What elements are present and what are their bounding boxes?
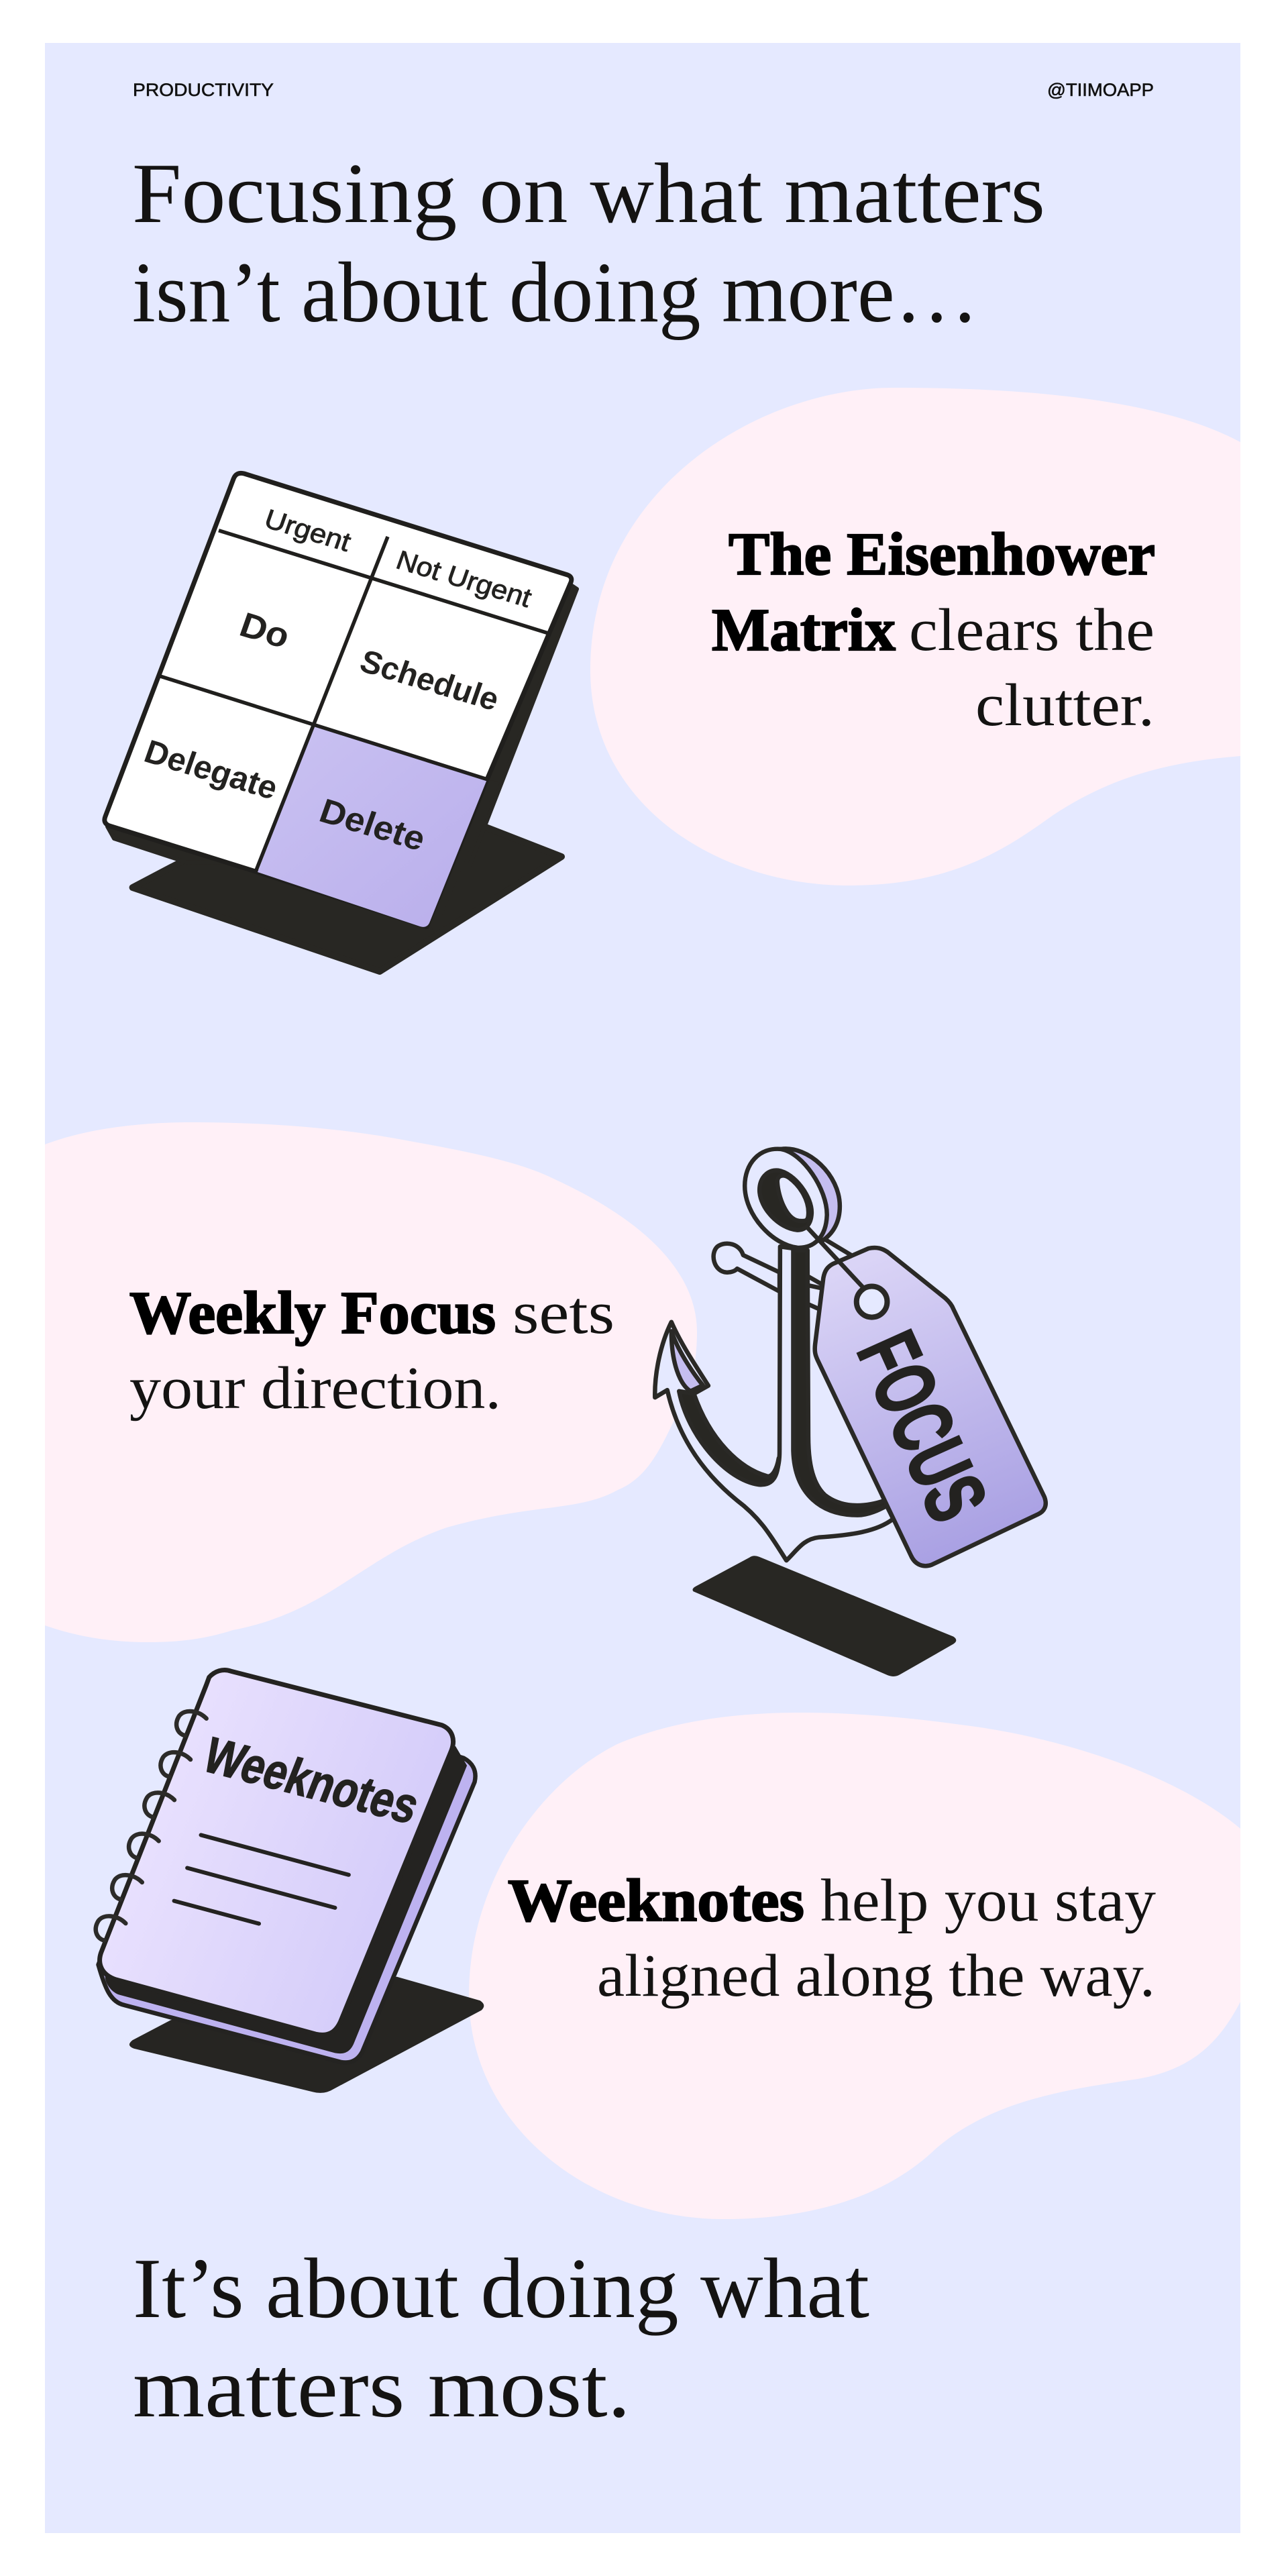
- category label: PRODUCTIVITY: [133, 80, 274, 100]
- anchor shape: [655, 1239, 893, 1560]
- anchor body: [655, 1246, 893, 1560]
- callout text: The Eisenhower Matrix clears the clutter: The Eisenhower: [729, 521, 1155, 588]
- fluke highlight: [672, 1331, 703, 1391]
- illustration: Weeknotes notebook: [96, 1670, 484, 2093]
- callout text: The Eisenhower Matrix clears the clutter: [712, 521, 1155, 739]
- closing statement: matters most.: [133, 2340, 631, 2435]
- crossbar left ball: [714, 1244, 780, 1291]
- closing statement: It’s about doing what: [133, 2241, 869, 2336]
- title: isn’t about doing more…: [132, 245, 979, 340]
- note lines: [174, 1835, 349, 1924]
- anchor base shadow: [692, 1556, 956, 1676]
- quadrant labels: Schedule: [356, 643, 503, 718]
- notebook label: Weeknotes: [196, 1727, 427, 1835]
- blob: Eisenhower callout background: [590, 388, 1240, 885]
- quadrant labels: Delegate: [140, 733, 282, 807]
- quadrant labels: Do: [235, 606, 294, 656]
- callout text: Weekly Focus sets your direction: your direction.: [129, 1355, 501, 1421]
- title: [132, 146, 1045, 340]
- notebook cover: [100, 1670, 453, 2035]
- callout text: Weekly Focus sets your direction: Weekly Focus: [129, 1280, 496, 1346]
- callout text: Weekly Focus sets your direction: [129, 1280, 614, 1421]
- bottom right edge cover: [430, 780, 498, 934]
- illustration: Eisenhower matrix board: [105, 473, 577, 971]
- callout text: The Eisenhower Matrix clears the clutter: clutter.: [975, 672, 1155, 739]
- callout text: The Eisenhower Matrix clears the clutter: clears the: [909, 597, 1155, 663]
- callout text: Weeknotes help you stay aligned: [508, 1868, 1156, 2009]
- callout text: Weeknotes help you stay aligned: Weeknotes: [508, 1868, 804, 1934]
- callout text: Weeknotes help you stay aligned: help you stay: [820, 1868, 1156, 1934]
- ground shadow: [133, 826, 561, 971]
- notebook ground shadow: [129, 1977, 484, 2093]
- delete quadrant: [258, 727, 487, 927]
- illustration: anchor with focus tag: [655, 1148, 1046, 1676]
- crossbar back: [808, 1239, 853, 1286]
- anchor ring: [745, 1148, 840, 1248]
- focus tag: [806, 1226, 1046, 1566]
- handle label: @TIIMOAPP: [1047, 80, 1154, 100]
- closing statement: [133, 2241, 869, 2435]
- callout text: Weekly Focus sets your direction: sets: [513, 1280, 614, 1346]
- quadrant labels: Urgent: [261, 504, 355, 557]
- crossbar right stub: [798, 1285, 824, 1309]
- blob: Weekly Focus callout background: [45, 1122, 697, 1642]
- spiral binding: [96, 1711, 207, 1941]
- notebook body: [96, 1670, 476, 2063]
- title: Focusing on what matters: [132, 146, 1045, 241]
- header labels: [133, 80, 1154, 100]
- board back shadow: [107, 585, 577, 865]
- quadrant labels: [140, 504, 535, 858]
- quadrant labels: Delete: [315, 792, 430, 858]
- shank shadow: [793, 1250, 886, 1515]
- matrix grid lines: [160, 531, 548, 870]
- quadrant labels: Not Urgent: [392, 545, 535, 613]
- tag label: FOCUS: [839, 1318, 1006, 1535]
- board face: [105, 473, 572, 927]
- left hook shadow: [679, 1391, 779, 1485]
- callout text: Weeknotes help you stay aligned: aligned along the way.: [597, 1943, 1155, 2009]
- callout text: The Eisenhower Matrix clears the clutter: Matrix: [712, 597, 896, 663]
- blob: Weeknotes callout background: [469, 1713, 1240, 2219]
